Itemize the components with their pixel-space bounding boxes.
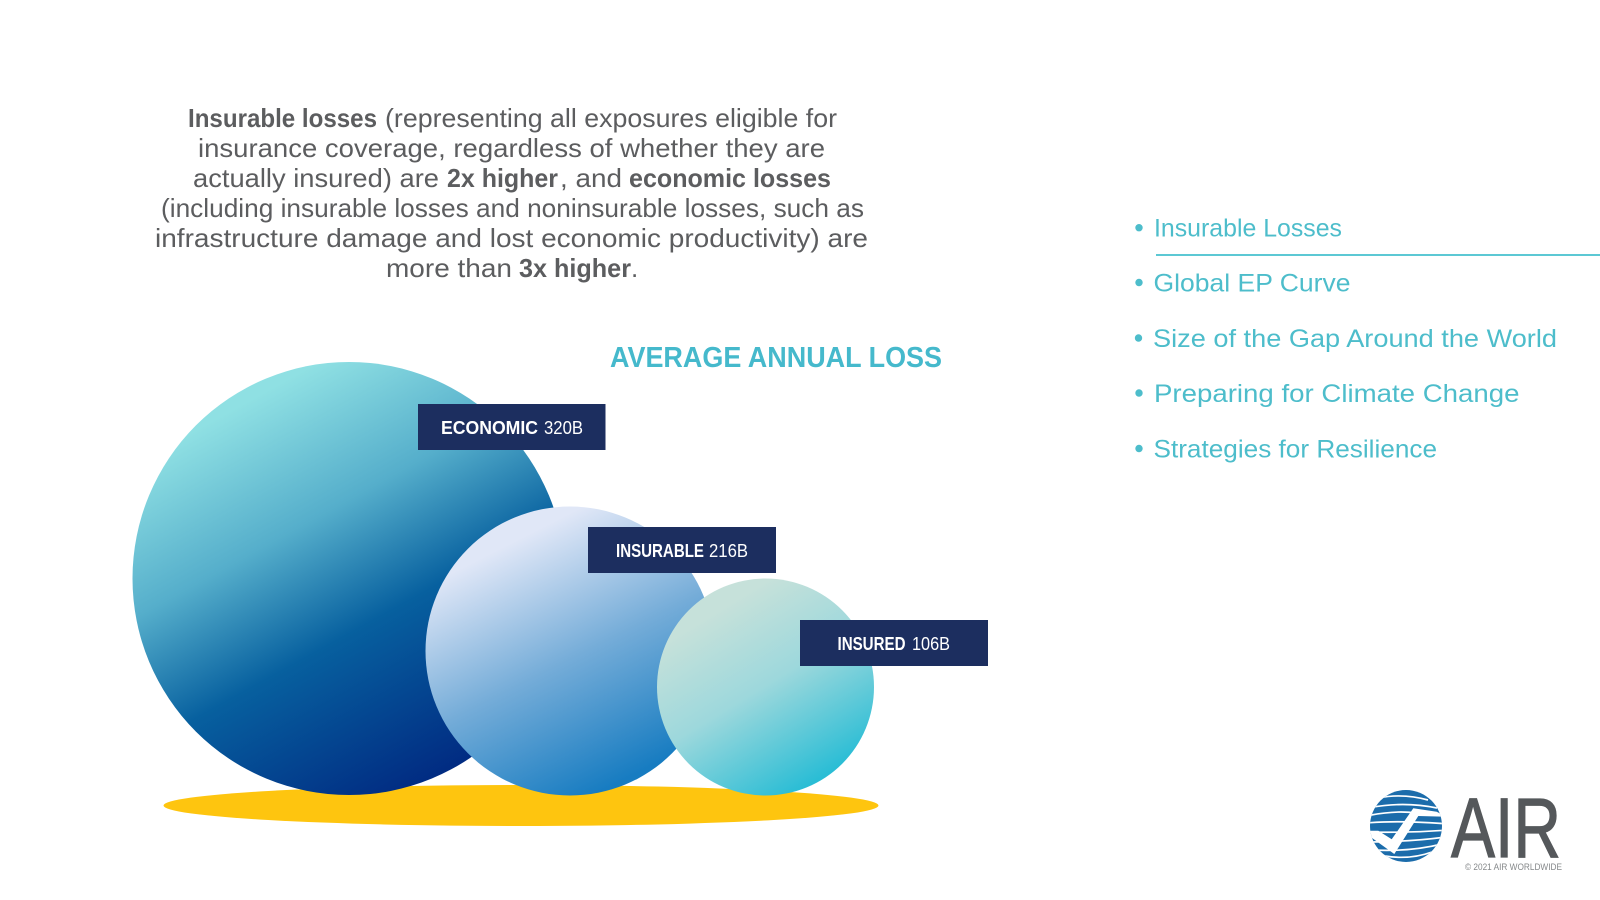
text block: insurable and economic losses explanation: 2x higher — [447, 163, 558, 193]
circle: insurable loss — [426, 506, 714, 796]
text block: insurable and economic losses explanation: economic losses — [629, 163, 831, 193]
text block: insurable and economic losses explanation: 3x higher — [519, 253, 631, 283]
agenda item: global EP curve: Global EP Curve — [1154, 270, 1350, 298]
chart: proportional loss circles — [132, 362, 988, 826]
text block: insurable and economic losses explanation: infrastructure damage and lost economic productivity) are — [155, 223, 868, 253]
text block: insurable and economic losses explanation: , and — [560, 163, 622, 193]
text block: insurable and economic losses explanation: (including insurable losses and noninsurable losses, such as — [161, 193, 864, 223]
agenda item: strategies for resilience: Strategies for Resilience — [1154, 436, 1437, 464]
label: insurable 216B: INSURABLE — [616, 541, 704, 561]
circle: economic loss — [132, 362, 566, 795]
text block: insurable and economic losses explanation: more than — [386, 253, 512, 283]
circle: insured loss — [657, 578, 874, 796]
heading: average annual loss: AVERAGE ANNUAL LOSS — [610, 342, 942, 374]
label: insured 106B: 106B — [912, 634, 950, 654]
label: insured 106B — [800, 620, 988, 666]
text block: insurable and economic losses explanation: . — [631, 253, 638, 283]
agenda item: preparing for climate change: Preparing for Climate Change — [1154, 380, 1520, 408]
panel: agenda list — [1135, 214, 1600, 464]
label: economic 320B: 320B — [544, 418, 583, 438]
agenda item: size of the gap: Size of the Gap Around the World — [1153, 325, 1557, 353]
icon: striped globe with check mark — [1370, 790, 1442, 862]
text block: insurable and economic losses explanation: insurance coverage, regardless of whether they are — [198, 133, 825, 163]
copyright: © 2021 AIR WORLDWIDE — [1465, 862, 1562, 872]
agenda item: insurable losses: Insurable Losses — [1154, 214, 1342, 242]
label: insurable 216B — [588, 527, 776, 573]
label: economic 320B — [418, 404, 606, 450]
text block: insurable and economic losses explanation: (representing all exposures eligible for — [385, 103, 837, 133]
label: economic 320B: ECONOMIC — [441, 418, 538, 438]
label: insured 106B: INSURED — [838, 634, 906, 654]
text block: insurable and economic losses explanation: actually insured) are — [193, 163, 439, 193]
label: insurable 216B: 216B — [709, 541, 748, 561]
text block: insurable and economic losses explanation: Insurable losses — [188, 103, 377, 133]
wordmark: AIR: AIR — [1451, 781, 1561, 875]
logo: AIR — [1370, 790, 1562, 870]
agenda active underline — [1156, 254, 1600, 256]
text block: insurable and economic losses explanation — [155, 103, 868, 283]
ground ellipse — [164, 785, 878, 826]
